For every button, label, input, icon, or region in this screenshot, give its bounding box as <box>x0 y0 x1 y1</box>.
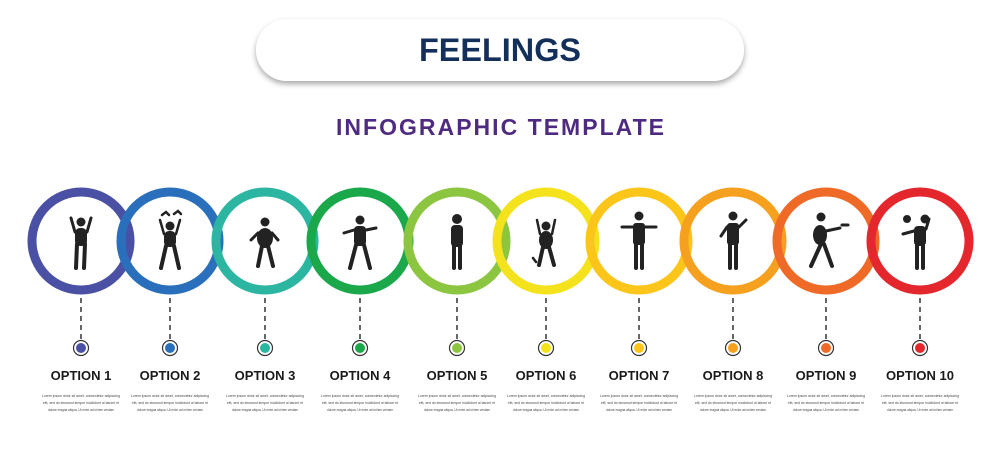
description texts: elit, sed do eiusmod tempor incididunt ut labore et <box>227 400 304 405</box>
description texts: Lorem ipsum dolor sit amet, consectetur adipiscing <box>42 393 120 398</box>
description texts: elit, sed do eiusmod tempor incididunt ut labore et <box>132 400 209 405</box>
option labels: OPTION 9 <box>796 368 856 383</box>
description texts: elit, sed do eiusmod tempor incididunt ut labore et <box>43 400 120 405</box>
description texts: Lorem ipsum dolor sit amet, consectetur adipiscing <box>507 393 585 398</box>
subtitle: INFOGRAPHIC TEMPLATE <box>336 114 664 140</box>
description texts: elit, sed do eiusmod tempor incididunt ut labore et <box>322 400 399 405</box>
option labels: OPTION 4 <box>330 368 391 383</box>
description texts: elit, sed do eiusmod tempor incididunt ut labore et <box>695 400 772 405</box>
title pill: FEELINGS <box>419 32 581 68</box>
description texts: elit, sed do eiusmod tempor incididunt ut labore et <box>788 400 865 405</box>
option labels: OPTION 8 <box>703 368 763 383</box>
description texts: Lorem ipsum dolor sit amet, consectetur adipiscing <box>694 393 772 398</box>
description texts: elit, sed do eiusmod tempor incididunt ut labore et <box>601 400 678 405</box>
icons: people figures <box>71 211 930 268</box>
option labels: OPTION 3 <box>235 368 295 383</box>
description texts: elit, sed do eiusmod tempor incididunt ut labore et <box>419 400 496 405</box>
ring chain <box>32 192 969 290</box>
description texts: Lorem ipsum dolor sit amet, consectetur adipiscing <box>881 393 959 398</box>
option labels: OPTION 6 <box>516 368 576 383</box>
description texts <box>42 393 959 412</box>
description texts: dolore magna aliqua. Ut enim ad minim veniam <box>700 407 767 412</box>
description texts: elit, sed do eiusmod tempor incididunt ut labore et <box>882 400 959 405</box>
option labels: OPTION 5 <box>427 368 487 383</box>
description texts: Lorem ipsum dolor sit amet, consectetur adipiscing <box>321 393 399 398</box>
description texts: dolore magna aliqua. Ut enim ad minim veniam <box>793 407 860 412</box>
description texts: dolore magna aliqua. Ut enim ad minim veniam <box>513 407 580 412</box>
option labels: OPTION 10 <box>886 368 954 383</box>
option labels: OPTION 1 <box>51 368 111 383</box>
description texts: dolore magna aliqua. Ut enim ad minim veniam <box>137 407 204 412</box>
description texts: Lorem ipsum dolor sit amet, consectetur adipiscing <box>787 393 865 398</box>
description texts: dolore magna aliqua. Ut enim ad minim veniam <box>232 407 299 412</box>
connectors: dashed lines and dots <box>74 298 928 356</box>
description texts: Lorem ipsum dolor sit amet, consectetur adipiscing <box>131 393 209 398</box>
description texts: Lorem ipsum dolor sit amet, consectetur adipiscing <box>226 393 304 398</box>
description texts: elit, sed do eiusmod tempor incididunt ut labore et <box>508 400 585 405</box>
option labels: OPTION 7 <box>609 368 669 383</box>
description texts: dolore magna aliqua. Ut enim ad minim veniam <box>424 407 491 412</box>
description texts: dolore magna aliqua. Ut enim ad minim veniam <box>606 407 673 412</box>
description texts: Lorem ipsum dolor sit amet, consectetur adipiscing <box>418 393 496 398</box>
description texts: dolore magna aliqua. Ut enim ad minim veniam <box>327 407 394 412</box>
description texts: Lorem ipsum dolor sit amet, consectetur adipiscing <box>600 393 678 398</box>
option labels: OPTION 2 <box>140 368 200 383</box>
description texts: dolore magna aliqua. Ut enim ad minim veniam <box>887 407 954 412</box>
description texts: dolore magna aliqua. Ut enim ad minim veniam <box>48 407 115 412</box>
option labels <box>51 368 954 383</box>
title pill <box>256 19 744 81</box>
